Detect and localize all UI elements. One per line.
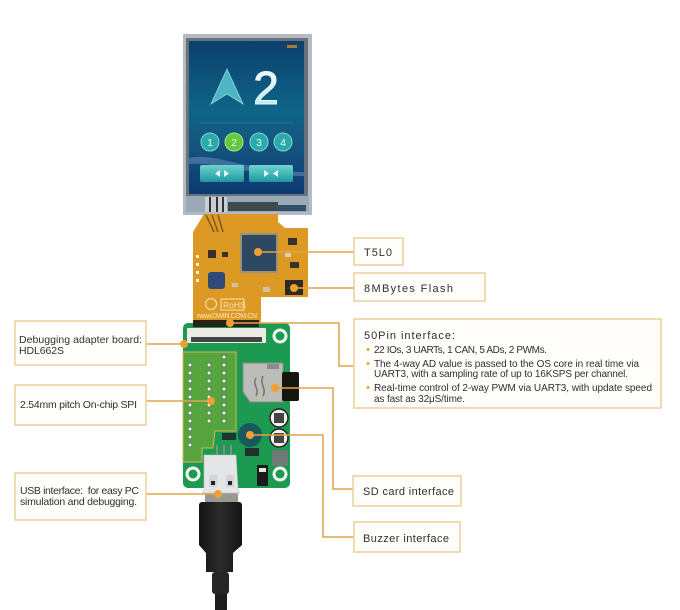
TFT touch screen display [183, 34, 312, 215]
RoHS marking [206, 298, 244, 310]
ZIF connector [187, 328, 266, 343]
leader line: on-chip SPI [146, 400, 211, 402]
mounting holes [187, 330, 286, 480]
label: SD card interface: SD card interface [363, 486, 454, 498]
label: on-chip SPI [15, 385, 146, 425]
buzzer [238, 423, 262, 447]
USB cable and plug [199, 502, 242, 610]
leader line: T5L0 [258, 251, 354, 253]
label: 8MBytes Flash [354, 273, 485, 301]
bullet list [366, 345, 652, 405]
bullet list: 22 IOs, 3 UARTs, 1 CAN, 5 ADs, 2 PWMs. [374, 345, 547, 356]
label: 8MBytes Flash: 8MBytes Flash [364, 283, 453, 295]
number buttons [201, 133, 292, 151]
small regulator chip [208, 272, 225, 289]
flash chip [285, 280, 303, 295]
SD card slot [243, 363, 283, 402]
label: buzzer interface: Buzzer interface [363, 533, 449, 545]
label: USB interface: USB interface: for easy PC [20, 485, 139, 497]
label: debugging adapter board: HDL662S [19, 345, 64, 357]
capacitors [270, 409, 288, 447]
bullet list: as fast as 32μS/time. [374, 394, 465, 405]
T5L0 chip [240, 233, 278, 273]
leader line: debugging adapter board [146, 343, 184, 345]
control buttons [200, 165, 293, 182]
panel heading: 50Pin interface: [364, 330, 455, 342]
leader line: USB interface [146, 493, 218, 495]
leader line: flash [294, 287, 354, 289]
label: USB interface: simulation and debugging. [20, 496, 137, 508]
label: SD card interface [353, 476, 461, 506]
flexible PCB with T5L0 chip [193, 214, 308, 325]
bullet list: The 4-way AD value is passed to the OS core in real time via [374, 359, 639, 370]
bullet list: UART3, with a sampling rate of up to 16KSPS per channel. [374, 369, 628, 380]
label: buzzer interface [354, 522, 460, 552]
label: USB interface [15, 473, 146, 520]
label: T5L0 [354, 238, 403, 265]
number buttons: 1 [207, 137, 213, 149]
label: T5L0: T5L0 [364, 247, 392, 259]
number buttons: 3 [256, 137, 262, 149]
USB A connector [202, 445, 240, 502]
label: debugging adapter board: Debugging adapter board: [19, 334, 142, 346]
label: debugging adapter board [15, 321, 146, 365]
flexible PCB with T5L0 chip: RoHS [223, 300, 246, 310]
leader line: SD card interface [275, 388, 353, 489]
number buttons: 4 [280, 137, 286, 149]
bullet list: Real-time control of 2-way PWM via UART3, with update speed [374, 383, 652, 394]
green debugging adapter board [183, 320, 299, 488]
icon: navigation arrow [211, 69, 243, 104]
panel: 50Pin interface [354, 319, 661, 408]
leader line: buzzer interface [250, 435, 354, 537]
flexible PCB with T5L0 chip: www.DWIN.COM.CN [196, 313, 257, 320]
pin header region outline [183, 352, 236, 462]
number buttons: 2 [231, 137, 237, 149]
label: on-chip SPI: 2.54mm pitch On-chip SPI [20, 399, 137, 411]
large number 2: 2 [253, 62, 279, 114]
callout markers [180, 248, 298, 498]
leader line: 50Pin interface [230, 323, 354, 366]
